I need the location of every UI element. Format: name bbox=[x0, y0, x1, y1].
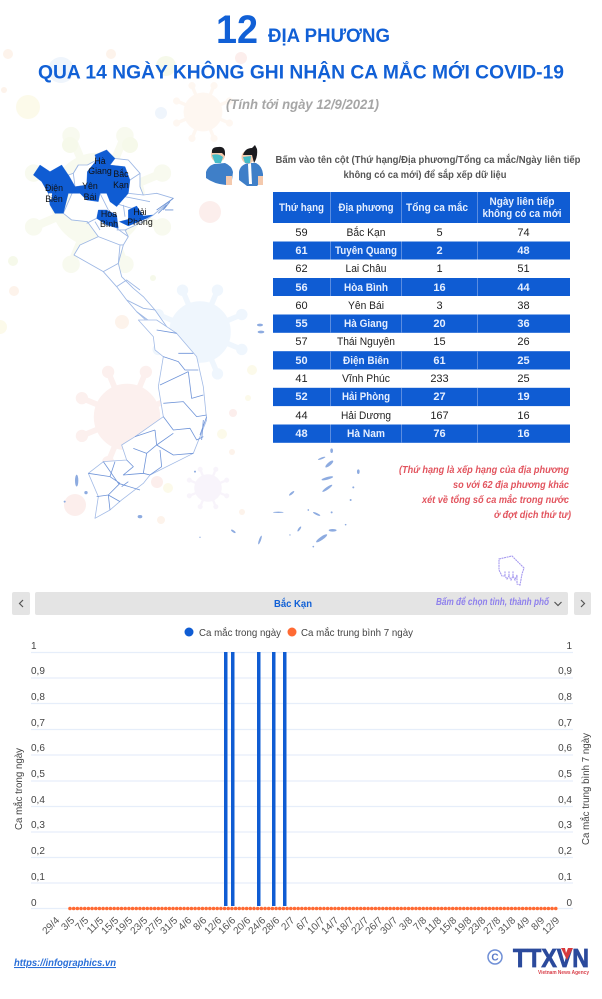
table rows: Vĩnh Phúc bbox=[342, 373, 390, 385]
left axis labels bbox=[31, 641, 45, 909]
date labels: 19/8 bbox=[453, 915, 474, 937]
map labels: Bái bbox=[84, 192, 96, 202]
table rows: 3 bbox=[436, 300, 443, 312]
date labels: 11/8 bbox=[423, 915, 444, 936]
date labels: 6/7 bbox=[295, 915, 312, 933]
table rows: 51 bbox=[517, 263, 530, 275]
date labels: 28/6 bbox=[261, 915, 282, 937]
date labels: 7/8 bbox=[412, 915, 429, 933]
table rows: Hải Dương bbox=[341, 410, 391, 422]
right axis labels: 0,7 bbox=[558, 718, 572, 729]
right axis labels: 0,1 bbox=[558, 872, 572, 883]
map labels: Biên bbox=[45, 194, 63, 204]
icon: masked man bbox=[206, 147, 233, 185]
note on ranking bbox=[399, 464, 571, 521]
left axis labels: 0,3 bbox=[31, 820, 45, 831]
table rows: 233 bbox=[430, 373, 449, 385]
table header bbox=[273, 192, 570, 223]
bar chart: daily and average cases bbox=[12, 641, 592, 937]
table rows: 16 bbox=[517, 428, 530, 440]
date labels: 12/6 bbox=[203, 915, 224, 937]
note on ranking: ở đợt dịch thứ tư) bbox=[494, 509, 571, 521]
dropdown: Bắc Kạn bbox=[274, 597, 312, 610]
table rows: Thái Nguyên bbox=[337, 336, 395, 348]
title bbox=[38, 8, 564, 84]
table rows: 38 bbox=[517, 300, 530, 312]
note on ranking: so với 62 địa phương khác bbox=[453, 479, 569, 491]
logo: TTXVN: TTXVN bbox=[513, 943, 589, 973]
source link: https://infographics.vn bbox=[14, 957, 116, 969]
date labels: 10/7 bbox=[306, 915, 327, 937]
date labels: 20/6 bbox=[232, 915, 253, 937]
date labels: 15/5 bbox=[100, 915, 121, 937]
instruction text: không có ca mới) để sắp xếp dữ liệu bbox=[344, 168, 506, 181]
map labels: Hà bbox=[94, 156, 106, 166]
left axis labels: 0,2 bbox=[31, 846, 45, 857]
table rows: Hòa Bình bbox=[344, 282, 388, 294]
title: QUA 14 NGÀY KHÔNG GHI NHẬN CA MẮC MỚI COVID-19 bbox=[38, 60, 564, 84]
date labels: 22/7 bbox=[350, 915, 371, 937]
date labels: 19/5 bbox=[114, 915, 135, 937]
table rows: 60 bbox=[295, 300, 308, 312]
date labels: 12/9 bbox=[541, 915, 562, 937]
date labels: 8/6 bbox=[192, 915, 209, 933]
date labels: 14/7 bbox=[320, 915, 341, 937]
map: northern and central outline bbox=[63, 150, 178, 340]
table rows: Điện Biên bbox=[343, 355, 389, 367]
table rows: Bắc Kạn bbox=[346, 226, 386, 239]
note on ranking: (Thứ hạng là xếp hạng của địa phương bbox=[399, 464, 570, 476]
chart legend: Ca mắc trung bình 7 ngày bbox=[301, 626, 414, 639]
date labels: 30/7 bbox=[379, 915, 400, 937]
date labels: 24/6 bbox=[247, 915, 268, 937]
axis title: left: Ca mắc trong ngày bbox=[12, 748, 25, 830]
table rows: 15 bbox=[433, 336, 446, 348]
date labels: 18/7 bbox=[335, 915, 356, 937]
axis title: right: Ca mắc trung bình 7 ngày bbox=[579, 733, 592, 845]
date labels: 23/8 bbox=[467, 915, 488, 937]
table rows: 62 bbox=[295, 263, 308, 275]
average line dots bbox=[70, 907, 558, 910]
title: 12 bbox=[216, 8, 258, 52]
table rows: 56 bbox=[295, 282, 308, 294]
map: highlighted northern provinces bbox=[33, 150, 153, 228]
table rows: 48 bbox=[517, 245, 530, 257]
map labels: Bình bbox=[100, 219, 118, 229]
table rows: 16 bbox=[517, 410, 530, 422]
right axis labels: 0,6 bbox=[558, 743, 572, 754]
date labels: 27/8 bbox=[482, 915, 503, 937]
table rows: 41 bbox=[295, 373, 308, 385]
right axis labels: 1 bbox=[566, 641, 572, 652]
table header: Địa phương bbox=[338, 202, 394, 214]
table rows: 20 bbox=[433, 318, 446, 330]
date labels: 29/4 bbox=[41, 915, 62, 937]
title: ĐỊA PHƯƠNG bbox=[268, 26, 390, 47]
left axis labels: 0,1 bbox=[31, 872, 45, 883]
left axis labels: 1 bbox=[31, 641, 37, 652]
note on ranking: xét về tổng số ca mắc trong nước bbox=[421, 493, 569, 506]
icon: masked woman bbox=[239, 145, 263, 186]
left axis labels: 0,5 bbox=[31, 769, 45, 780]
chart legend bbox=[184, 626, 414, 639]
date labels: 26/7 bbox=[364, 915, 385, 937]
date labels: 4/6 bbox=[177, 915, 194, 933]
table rows: Tuyên Quang bbox=[335, 245, 397, 257]
right axis labels: 0,8 bbox=[558, 692, 572, 703]
logo: TTXVN bbox=[488, 943, 589, 976]
data table bbox=[273, 192, 570, 443]
date labels: 23/5 bbox=[129, 915, 150, 937]
map: Vietnam provinces bbox=[33, 150, 360, 547]
table rows: 36 bbox=[517, 318, 530, 330]
table rows: 44 bbox=[517, 282, 530, 294]
table rows: 1 bbox=[436, 263, 443, 275]
date labels: 2/7 bbox=[280, 915, 297, 933]
table rows: 25 bbox=[517, 355, 530, 367]
table rows: Hà Nam bbox=[347, 428, 385, 440]
table rows: 44 bbox=[295, 410, 308, 422]
table header: Thứ hạng bbox=[279, 202, 324, 214]
table rows: 76 bbox=[433, 428, 446, 440]
map: southern outline and province borders bbox=[88, 320, 207, 518]
date labels: 31/5 bbox=[159, 915, 180, 937]
table rows: Hải Phòng bbox=[342, 391, 390, 403]
table rows: 25 bbox=[517, 373, 530, 385]
table rows: 61 bbox=[433, 355, 446, 367]
map labels: Yên bbox=[82, 181, 98, 191]
table header: Tổng ca mắc bbox=[406, 201, 468, 214]
map labels: Hải bbox=[133, 207, 147, 217]
background: virus decorations bbox=[0, 49, 257, 524]
date labels: 16/6 bbox=[217, 915, 238, 937]
table rows: 74 bbox=[517, 227, 530, 239]
subtitle: (Tính tới ngày 12/9/2021) bbox=[226, 96, 379, 112]
map: islands bbox=[64, 324, 360, 547]
table rows: 59 bbox=[295, 227, 308, 239]
table rows: 48 bbox=[295, 428, 308, 440]
chart legend: Ca mắc trong ngày bbox=[199, 626, 282, 639]
map labels: Hòa bbox=[101, 209, 117, 219]
map labels bbox=[45, 156, 153, 229]
button: previous bbox=[12, 592, 30, 615]
logo: TTXVN: C bbox=[491, 952, 499, 964]
bars bbox=[224, 652, 286, 906]
left axis labels: 0,7 bbox=[31, 718, 45, 729]
right axis labels: 0,9 bbox=[558, 666, 572, 677]
right axis labels: 0,5 bbox=[558, 769, 572, 780]
instruction text bbox=[276, 153, 580, 181]
table rows: 50 bbox=[295, 355, 308, 367]
left axis labels: 0,6 bbox=[31, 743, 45, 754]
table rows: 27 bbox=[433, 391, 446, 403]
map labels: Phòng bbox=[127, 217, 153, 227]
button: next bbox=[574, 592, 591, 615]
table rows: 5 bbox=[436, 227, 443, 239]
date labels: 7/5 bbox=[74, 915, 91, 933]
table rows: 26 bbox=[517, 336, 530, 348]
date labels: 31/8 bbox=[497, 915, 518, 937]
table rows: Lai Châu bbox=[346, 263, 386, 275]
right axis labels: 0 bbox=[566, 898, 572, 909]
left axis labels: 0,4 bbox=[31, 795, 45, 806]
date labels: 11/5 bbox=[85, 915, 106, 936]
map labels: Điện bbox=[45, 183, 63, 193]
left axis labels: 0 bbox=[31, 898, 37, 909]
map labels: Giang bbox=[88, 166, 112, 176]
right axis labels bbox=[558, 641, 572, 909]
right axis labels: 0,2 bbox=[558, 846, 572, 857]
table rows: 167 bbox=[430, 410, 449, 422]
date labels: 8/9 bbox=[530, 915, 547, 933]
table rows bbox=[273, 226, 570, 443]
table rows: 61 bbox=[295, 245, 308, 257]
date labels: 4/9 bbox=[515, 915, 532, 933]
right axis labels: 0,4 bbox=[558, 795, 572, 806]
date labels: 3/8 bbox=[398, 915, 415, 933]
date labels: 27/5 bbox=[144, 915, 165, 937]
dropdown bbox=[35, 592, 568, 615]
left axis labels: 0,9 bbox=[31, 666, 45, 677]
map labels: Kạn bbox=[113, 180, 129, 190]
left axis labels: 0,8 bbox=[31, 692, 45, 703]
dropdown: Bấm để chọn tỉnh, thành phố bbox=[436, 596, 550, 608]
table rows: 19 bbox=[517, 391, 530, 403]
table rows: Hà Giang bbox=[344, 318, 388, 330]
table rows: 55 bbox=[295, 318, 308, 330]
table rows: 52 bbox=[295, 391, 308, 403]
map labels: Bắc bbox=[113, 169, 129, 179]
table rows: 16 bbox=[433, 282, 446, 294]
table rows: Yên Bái bbox=[348, 300, 384, 312]
date labels: 15/8 bbox=[438, 915, 459, 937]
table rows: 57 bbox=[295, 336, 308, 348]
icon: pointing hand bbox=[499, 556, 524, 585]
date labels bbox=[41, 915, 562, 937]
table header: Ngày liên tiếp bbox=[490, 196, 555, 208]
province selector bbox=[12, 592, 591, 615]
logo: TTXVN: Vietnam News Agency bbox=[538, 970, 589, 976]
date labels: 3/5 bbox=[60, 915, 77, 933]
right axis labels: 0,3 bbox=[558, 820, 572, 831]
table rows: 2 bbox=[436, 245, 443, 257]
table header: không có ca mới bbox=[482, 208, 562, 220]
